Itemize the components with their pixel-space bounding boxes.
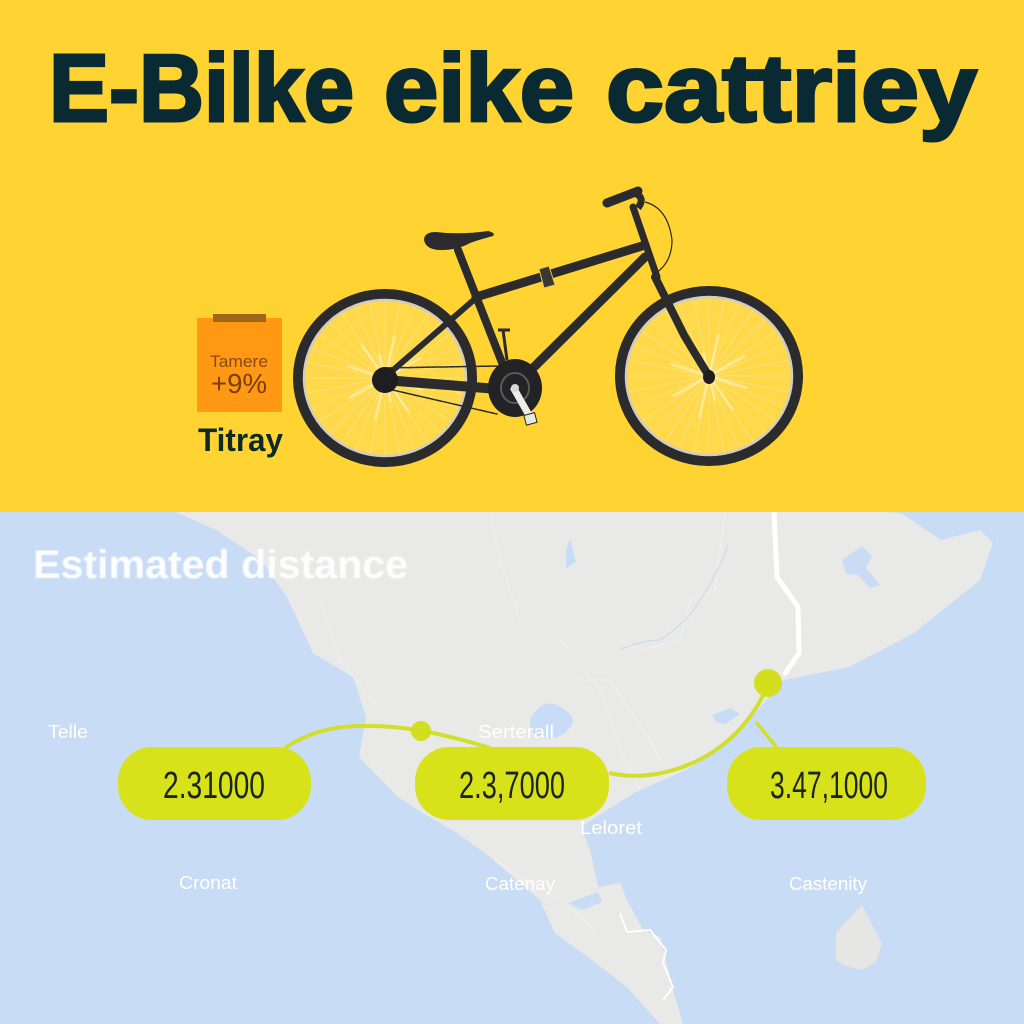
map labels: Telle xyxy=(48,722,88,742)
kickstand stub xyxy=(498,330,510,360)
front hub xyxy=(703,370,715,384)
stat pill 3: 3.47,1000 xyxy=(770,765,888,807)
saddle xyxy=(424,231,494,250)
map labels xyxy=(48,722,867,894)
title: eike xyxy=(384,35,574,142)
map labels: Catenay xyxy=(485,874,555,894)
rear hub xyxy=(372,367,398,393)
frame xyxy=(384,207,709,414)
callout: orange tag xyxy=(197,314,282,412)
panel: yellow header xyxy=(0,0,1024,512)
stat pill 1: 2.31000 xyxy=(163,765,265,807)
map labels: Castenity xyxy=(789,874,867,894)
label: Titray: Titray xyxy=(198,422,283,458)
illustration: bicycle xyxy=(298,191,798,462)
stat pill 2: 2.3,7000 xyxy=(459,765,565,807)
land xyxy=(176,512,993,1024)
route dot: east xyxy=(754,669,782,697)
map labels: Leloret xyxy=(580,818,642,838)
brake cable xyxy=(645,202,672,273)
callout: orange tag: Tamere xyxy=(210,352,268,371)
callout: orange tag: +9% xyxy=(211,368,267,399)
title: E-Bilke xyxy=(49,35,354,142)
road xyxy=(774,512,799,675)
frame bracket xyxy=(539,266,555,288)
stat pill 2 xyxy=(415,747,609,820)
title: cattriey xyxy=(606,35,977,142)
chainring and crank xyxy=(488,359,542,425)
island xyxy=(836,905,882,970)
route dot: middle xyxy=(411,721,431,741)
lakes xyxy=(530,538,880,910)
rear wheel xyxy=(298,294,472,462)
stat pill 3 xyxy=(727,747,926,820)
handlebar xyxy=(607,191,638,203)
route connectors xyxy=(285,685,778,776)
map labels: Cronat xyxy=(179,873,237,893)
stat pill 1 xyxy=(118,747,311,820)
front wheel xyxy=(620,291,798,461)
rivers and borders xyxy=(320,512,725,930)
panel: map xyxy=(0,512,1024,1024)
map labels: Serterall xyxy=(478,722,554,742)
heading: Estimated distance: Estimated distance xyxy=(33,543,408,587)
